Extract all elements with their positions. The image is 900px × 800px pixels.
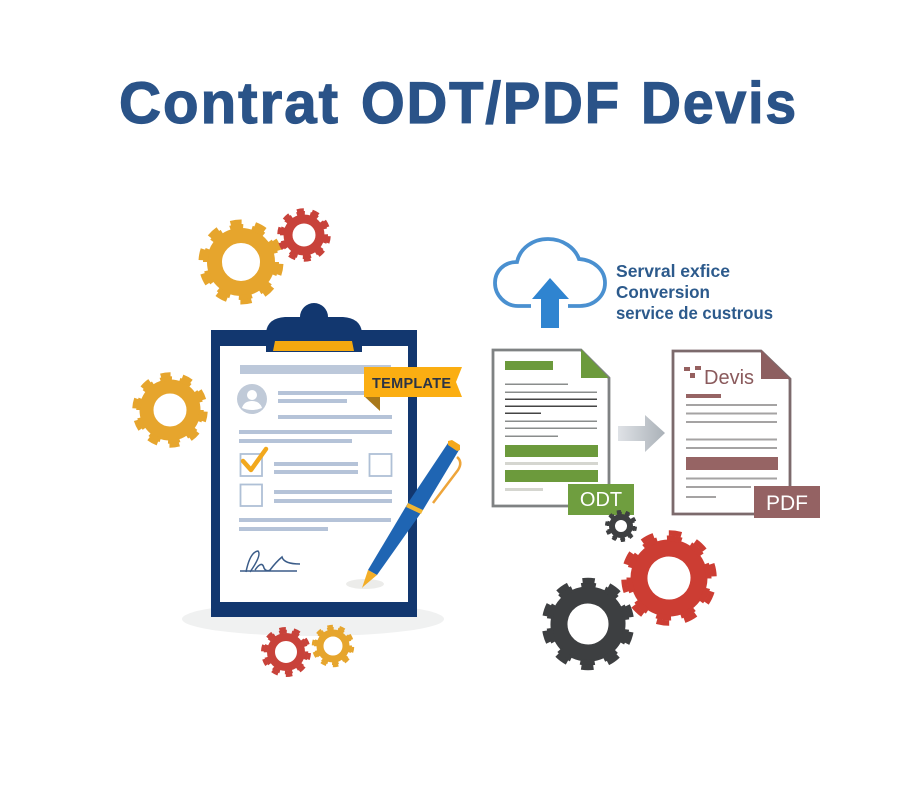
avatar icon xyxy=(237,384,267,414)
Devis heading: Devis xyxy=(704,367,754,389)
service text block: service de custrous xyxy=(616,303,773,323)
icon: small dark gear xyxy=(606,511,636,541)
icon: pen xyxy=(362,440,460,588)
icon: bottom yellow gear xyxy=(313,626,353,666)
clipboard board xyxy=(211,330,417,617)
document fold xyxy=(581,349,609,378)
form header line xyxy=(240,365,391,374)
signature xyxy=(240,551,300,572)
icon: big dark gear xyxy=(539,575,637,673)
icon: large yellow gear xyxy=(201,222,281,302)
red bars xyxy=(686,394,778,470)
ODT document xyxy=(493,349,609,506)
shadow under clipboard xyxy=(182,602,444,636)
clipboard clip xyxy=(266,303,362,352)
icon: big red gear xyxy=(614,523,724,633)
service text block xyxy=(616,261,773,323)
PDF document xyxy=(673,350,790,514)
title: ODT/PDF xyxy=(361,71,621,136)
clipboard xyxy=(211,303,417,617)
title: Devis xyxy=(641,71,798,136)
form text lines xyxy=(239,391,392,531)
document lines xyxy=(505,384,597,437)
service text block: Servral exfice xyxy=(616,261,730,281)
checkboxes xyxy=(240,454,392,506)
title: Contrat xyxy=(119,71,340,136)
logo mark xyxy=(684,366,701,378)
PDF label xyxy=(754,486,820,518)
ODT label xyxy=(568,484,634,515)
clip yellow strip xyxy=(273,341,354,351)
document lines xyxy=(686,404,777,498)
document fold xyxy=(761,350,790,379)
check mark xyxy=(243,449,266,470)
service text block: Conversion xyxy=(616,282,710,302)
template ribbon xyxy=(364,367,462,411)
pen shadow xyxy=(346,579,384,589)
PDF label: PDF xyxy=(766,492,808,515)
arrow xyxy=(618,415,665,452)
title xyxy=(119,71,798,136)
ODT label: ODT xyxy=(580,489,622,511)
template ribbon: TEMPLATE xyxy=(372,376,451,392)
icon: left yellow gear xyxy=(134,374,206,446)
icon: small red gear xyxy=(279,210,329,260)
green bars xyxy=(505,361,598,482)
paper sheet xyxy=(220,346,408,602)
icon: bottom red gear xyxy=(262,628,310,676)
icon: cloud upload xyxy=(495,239,605,328)
